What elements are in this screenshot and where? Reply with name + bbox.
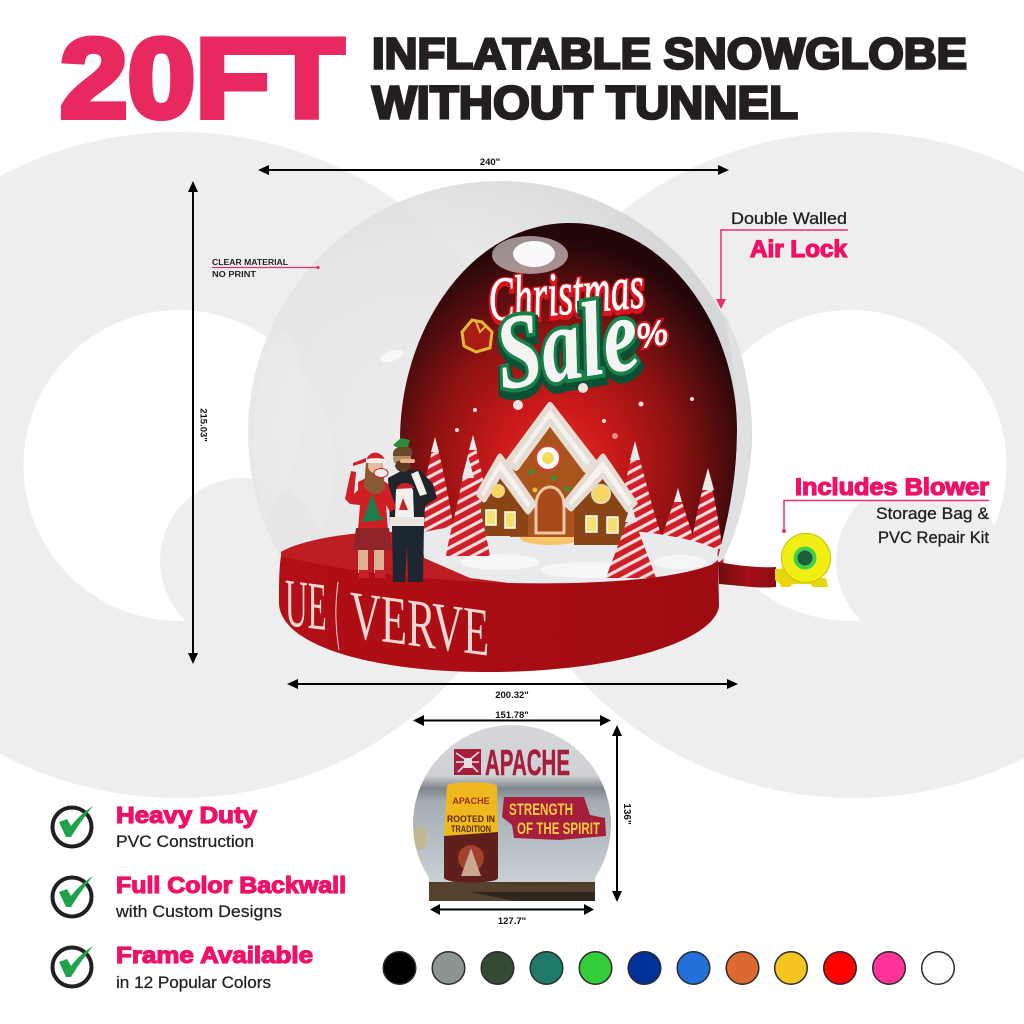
beer can xyxy=(444,782,498,882)
beer can: APACHE xyxy=(452,796,490,806)
icon: yellow blower xyxy=(775,534,830,587)
heading: inflatable snowglobe without tunnel: WITHOUT TUNNEL xyxy=(372,76,798,128)
dimension: width 240 inches: 240" xyxy=(480,157,500,168)
bell icon xyxy=(462,320,492,352)
dimension: base width 200.32 inches xyxy=(287,679,738,701)
feature: full color backwall: with Custom Designs xyxy=(115,903,282,921)
feature: heavy duty xyxy=(52,802,257,851)
snow globe inflatable xyxy=(248,181,776,685)
clear globe dome xyxy=(248,181,752,556)
callout: double walled air lock: Double Walled xyxy=(731,210,847,228)
title: 20FT: 20FT xyxy=(60,16,344,141)
heading: inflatable snowglobe without tunnel xyxy=(372,30,967,128)
feature: full color backwall xyxy=(52,872,346,921)
feature: frame available: Frame Available xyxy=(116,942,313,968)
christmas script: Christmas xyxy=(486,255,647,337)
left house xyxy=(481,462,528,536)
feature: full color backwall: Full Color Backwall xyxy=(116,872,346,898)
printed backwall xyxy=(400,223,737,565)
callout: clear material no print: CLEAR MATERIAL xyxy=(212,257,288,267)
percent sign: % xyxy=(633,311,671,357)
base lettering: UE VERVE xyxy=(285,566,489,671)
christmas script: Christmas xyxy=(486,253,647,335)
backwall example banner: apache xyxy=(410,720,614,905)
dimension: top banner width 151.78 inches xyxy=(413,710,611,726)
brush slogan: OF THE SPIRIT xyxy=(517,819,600,838)
christmas script xyxy=(486,253,647,337)
dimension: width 240 inches xyxy=(258,157,729,175)
sale script: Sale xyxy=(487,274,646,412)
beer can: ROOTED IN xyxy=(447,814,495,824)
background swirl shapes xyxy=(0,132,1024,798)
apache logo: APACHE xyxy=(485,742,570,783)
callout: includes blower xyxy=(782,474,989,547)
dimension: banner base 127.7 inches: 127.7" xyxy=(498,916,526,927)
base lettering: UE VERVE: UE xyxy=(285,566,327,646)
air hose xyxy=(718,562,776,588)
glow at door xyxy=(520,531,580,545)
tree snow caps xyxy=(431,435,714,522)
dimension: base width 200.32 inches: 200.32" xyxy=(495,690,529,701)
sale script: Sale xyxy=(488,279,647,417)
brush slogan xyxy=(502,797,606,840)
dimension: height 215.03 inches xyxy=(188,181,208,664)
feature: frame available xyxy=(52,942,313,992)
apache logo xyxy=(454,742,570,783)
dimension: banner base 127.7 inches xyxy=(430,904,594,927)
dimension: banner height 136 inches xyxy=(612,725,632,902)
right house xyxy=(574,462,628,545)
heading: inflatable snowglobe without tunnel: INFLATABLE SNOWGLOBE xyxy=(372,30,967,78)
snow ground xyxy=(421,525,718,586)
snowflakes xyxy=(455,383,694,439)
feature: frame available: in 12 Popular Colors xyxy=(116,974,271,992)
right inner wall rim xyxy=(716,310,751,565)
sale artwork xyxy=(455,253,694,439)
gingerbread houses xyxy=(478,405,635,545)
callout: clear material no print xyxy=(212,257,320,279)
brush slogan: STRENGTH xyxy=(509,800,573,819)
icon: check mark xyxy=(52,946,93,986)
colour swatches xyxy=(383,952,954,984)
glare on backwall xyxy=(492,236,568,274)
callout: double walled air lock xyxy=(716,210,848,309)
christmas trees front row xyxy=(446,455,656,578)
dimension: height 215.03 inches: 215.03" xyxy=(198,408,208,442)
feature: heavy duty: PVC Construction xyxy=(116,833,254,851)
icon: check mark xyxy=(52,806,93,846)
woman xyxy=(345,453,396,578)
callout: clear material no print: NO PRINT xyxy=(212,269,257,279)
callout: includes blower: Storage Bag & xyxy=(876,505,989,523)
dimension: banner height 136 inches: 136" xyxy=(621,803,632,825)
icon: check mark xyxy=(52,876,93,916)
middle house xyxy=(510,412,590,537)
base lettering: UE VERVE: VERVE xyxy=(350,577,489,671)
dimension: top banner width 151.78 inches: 151.78" xyxy=(495,710,529,721)
inflatable base xyxy=(279,532,719,672)
man xyxy=(388,438,437,582)
people posing xyxy=(345,438,437,582)
callout: includes blower: PVC Repair Kit xyxy=(878,529,989,547)
beer can: TRADITION xyxy=(451,824,491,834)
callout: includes blower: Includes Blower xyxy=(795,474,989,501)
feature: heavy duty: Heavy Duty xyxy=(116,802,257,828)
callout: double walled air lock: Air Lock xyxy=(750,236,848,263)
sale script: Sale xyxy=(487,274,646,412)
christmas trees back row xyxy=(416,435,724,568)
